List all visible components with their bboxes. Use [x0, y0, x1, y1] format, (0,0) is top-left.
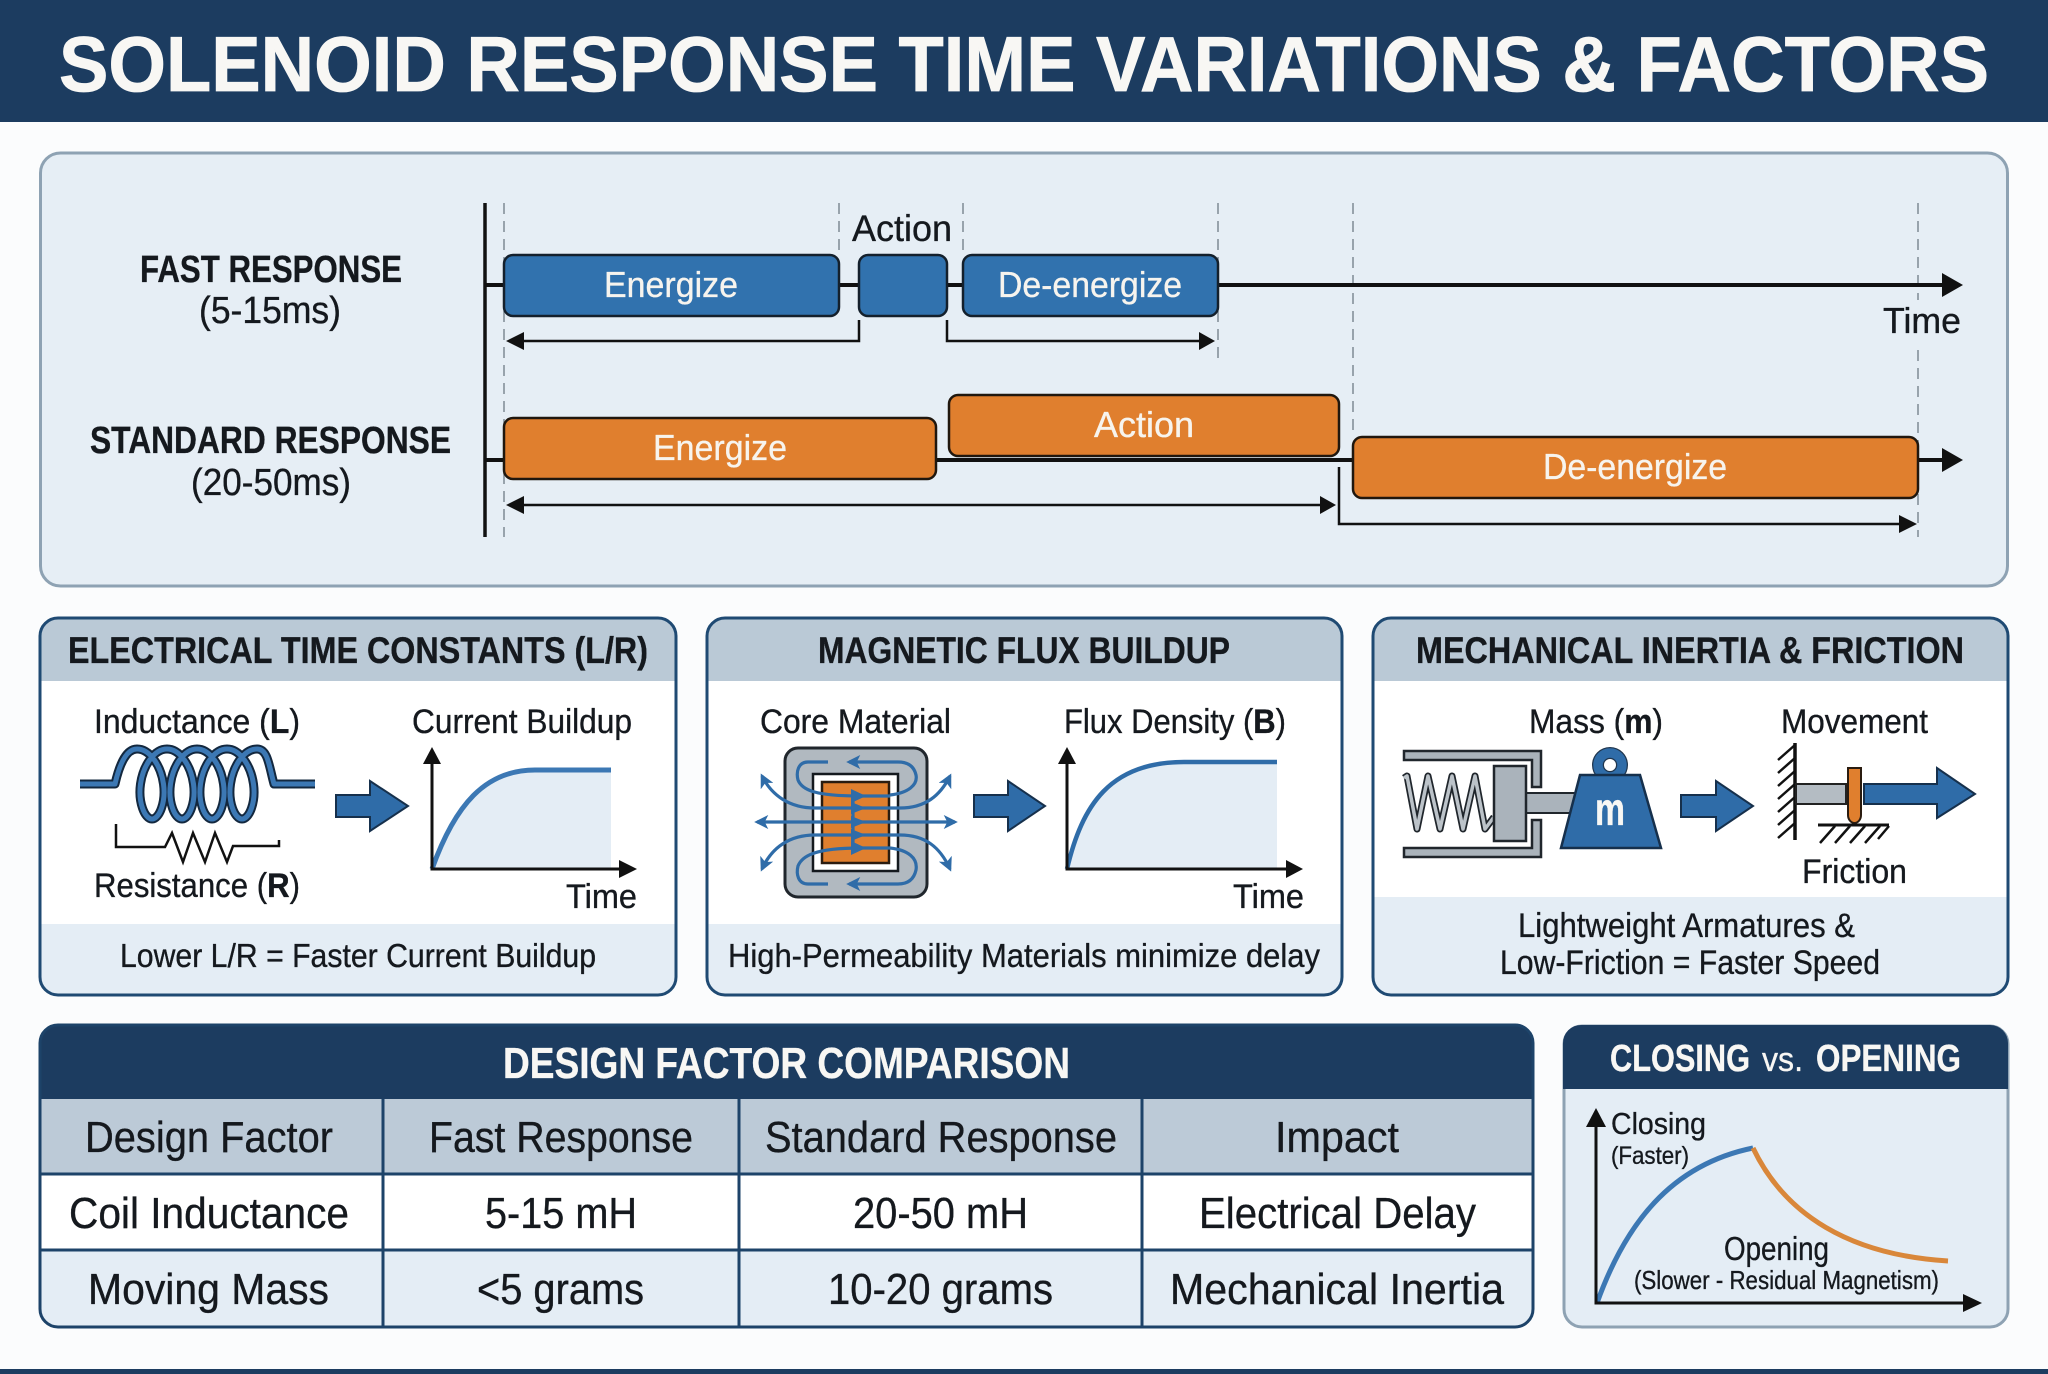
- takeaway: High-Permeability Materials minimize delay: [728, 937, 1320, 974]
- closing label: Closing: [1611, 1106, 1706, 1141]
- icon: resistor: [116, 824, 279, 862]
- standard action bar: [949, 395, 1339, 456]
- standard energize bar: Energize: [653, 427, 787, 468]
- heading: MAGNETIC FLUX BUILDUP: [818, 630, 1230, 671]
- header row: Design Factor: [85, 1113, 333, 1162]
- chart: current buildup: Current Buildup: [412, 703, 632, 741]
- fast duration arrows: [506, 320, 1215, 350]
- inductance label: Inductance (L): [94, 703, 300, 741]
- label: fast response: [140, 249, 402, 332]
- row: moving mass: <5 grams: [477, 1265, 644, 1314]
- icon: spring, armature and mass: [1404, 751, 1661, 857]
- table heading: DESIGN FACTOR COMPARISON: [503, 1039, 1070, 1088]
- fast action bar: Action: [852, 208, 952, 249]
- takeaway: Lower L/R = Faster Current Buildup: [120, 937, 596, 974]
- fast energize bar: Energize: [604, 264, 738, 305]
- chart: flux density: [1058, 703, 1304, 916]
- header row: [85, 1113, 1399, 1162]
- row: coil inductance: [69, 1189, 1476, 1238]
- chart: current buildup: [412, 703, 637, 916]
- row: coil inductance: 5-15 mH: [485, 1189, 637, 1238]
- takeaway: [1500, 907, 1880, 982]
- chart: closing and opening curves: [1586, 1108, 1982, 1312]
- table: design factor comparison: [40, 1025, 1533, 1327]
- row: coil inductance: 20-50 mH: [853, 1189, 1028, 1238]
- title banner: SOLENOID RESPONSE TIME VARIATIONS & FACTORS: [59, 20, 1989, 108]
- label: standard response: STANDARD RESPONSE: [90, 420, 451, 462]
- chart: current buildup: Time: [566, 878, 637, 916]
- row: moving mass: [88, 1265, 1504, 1314]
- chart: flux density: Time: [1233, 878, 1304, 916]
- friction label: Friction: [1802, 853, 1907, 891]
- heading: CLOSING: [1610, 1038, 1750, 1080]
- chart: flux density: Flux Density (B): [1064, 703, 1286, 741]
- fast energize bar: [504, 255, 839, 316]
- heading: [1610, 1038, 1961, 1080]
- closing label: (Faster): [1611, 1142, 1689, 1170]
- panel: closing vs opening: [1563, 1025, 2008, 1327]
- standard action bar: Action: [1094, 404, 1194, 445]
- icon: magnetic core with flux lines: [757, 748, 955, 897]
- mass label: Mass (m): [1529, 703, 1663, 741]
- standard de-energize bar: [1353, 437, 1918, 498]
- fast de-energize bar: De-energize: [998, 264, 1182, 305]
- heading: OPENING: [1816, 1038, 1961, 1080]
- takeaway: Low-Friction = Faster Speed: [1500, 944, 1880, 982]
- opening label: [1634, 1230, 1939, 1295]
- heading: MECHANICAL INERTIA & FRICTION: [1416, 630, 1964, 671]
- resistance label: Resistance (R): [94, 867, 300, 905]
- row: coil inductance: Coil Inductance: [69, 1189, 349, 1238]
- opening label: Opening: [1724, 1230, 1829, 1267]
- label: fast response: FAST RESPONSE: [140, 249, 402, 291]
- header row: Impact: [1275, 1113, 1399, 1162]
- label: fast response: (5-15ms): [199, 290, 341, 332]
- standard de-energize bar: De-energize: [1543, 446, 1727, 487]
- arrow: [1681, 781, 1753, 831]
- takeaway: Lightweight Armatures &: [1518, 907, 1855, 945]
- icon: inductor coil: [80, 749, 315, 819]
- panel: mechanical inertia and friction: [1373, 618, 2008, 995]
- opening label: (Slower - Residual Magnetism): [1634, 1265, 1939, 1295]
- footer bar: [0, 1369, 2048, 1374]
- header row: Standard Response: [765, 1113, 1117, 1162]
- movement label: Movement: [1781, 703, 1929, 741]
- time label: Time: [1883, 300, 1961, 341]
- panel: magnetic flux buildup: [707, 618, 1342, 995]
- row: moving mass: 10-20 grams: [828, 1265, 1053, 1314]
- fast de-energize bar: [963, 255, 1218, 316]
- panel: response timeline: [40, 153, 2008, 586]
- heading: ELECTRICAL TIME CONSTANTS (L/R): [68, 630, 648, 671]
- core material label: Core Material: [760, 703, 951, 741]
- panel: electrical time constants: [40, 618, 676, 995]
- heading: vs.: [1762, 1041, 1803, 1079]
- icon: spring, armature and mass: m: [1595, 783, 1625, 835]
- time axis: [485, 203, 1963, 537]
- row: moving mass: Moving Mass: [88, 1265, 329, 1314]
- label: standard response: (20-50ms): [191, 462, 351, 504]
- row: coil inductance: Electrical Delay: [1199, 1189, 1476, 1238]
- row: moving mass: Mechanical Inertia: [1170, 1265, 1504, 1314]
- closing label: [1611, 1106, 1706, 1170]
- label: standard response: [90, 420, 451, 504]
- arrow: [974, 781, 1045, 831]
- standard duration arrows: [506, 467, 1917, 533]
- header row: Fast Response: [429, 1113, 693, 1162]
- standard energize bar: [504, 418, 936, 479]
- arrow: [336, 781, 408, 831]
- icon: movement with friction: [1778, 743, 1975, 843]
- fast action bar: [852, 208, 952, 316]
